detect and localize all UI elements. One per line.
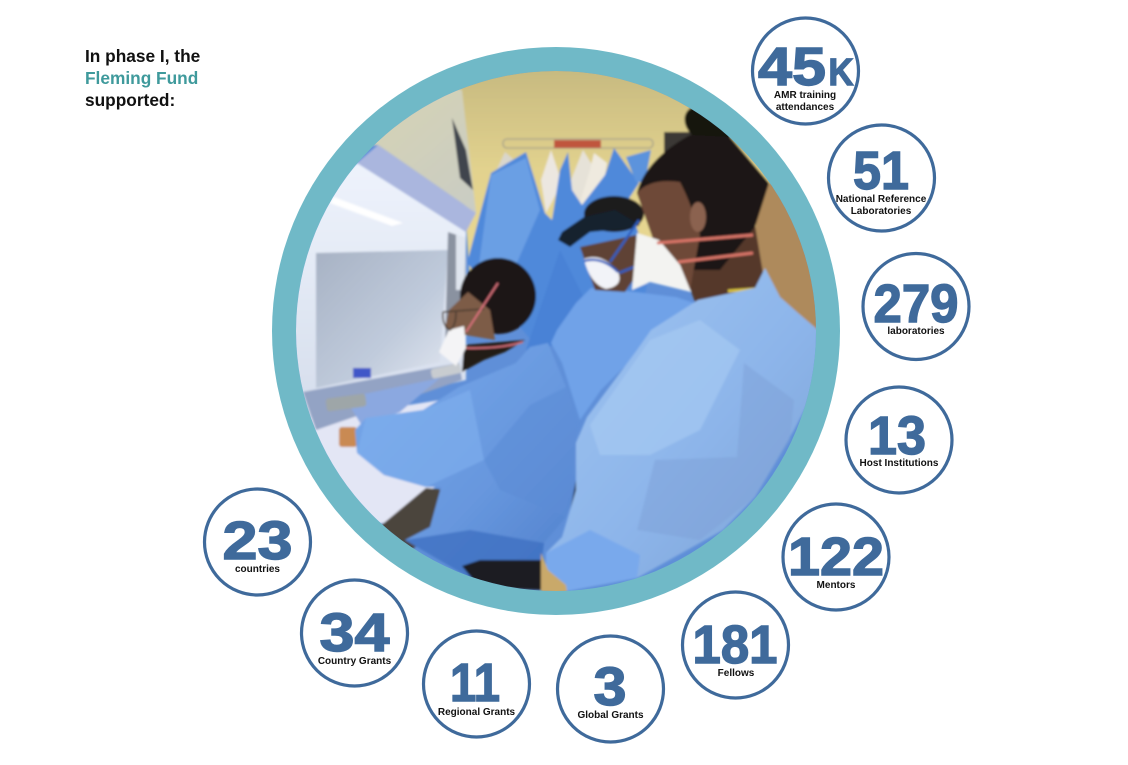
face [580,235,640,292]
heading: In phase I, the Fleming Fund supported: Fleming Fund [85,68,198,88]
stat: 45K AMR training attendances: K [828,52,854,94]
cuff [546,530,640,592]
cap [558,210,640,247]
wall notice and device [452,118,473,190]
stat: 279 laboratories: laboratories [887,326,945,337]
stat: 279 laboratories: 279 [874,274,958,334]
gown [551,288,700,420]
arm highlight [357,390,484,487]
stat: 13 Host Institutions: 13 [868,406,926,466]
stat: 11 Regional Grants: Regional Grants [438,707,516,718]
peg rail with red tag [503,139,653,148]
glasses [443,309,484,330]
stat: 45K AMR training attendances: 45 [758,37,826,97]
face [637,181,700,290]
hair bun [677,97,739,153]
black waist gap [570,482,578,506]
stat: 181 Fellows: Fellows [718,668,755,679]
stat: 23 countries [204,489,310,595]
left side wall [372,89,477,213]
glove [541,553,568,597]
blue gown folds behind workers [526,339,552,349]
mask straps [657,235,753,262]
stat: 3 Global Grants: 3 [594,657,626,717]
hood light strip [330,197,403,226]
hood window [316,250,448,388]
stat: 45K AMR training attendances: AMR training [774,90,836,101]
neck [689,226,764,302]
hair [584,196,644,232]
yellow back wall [458,71,770,272]
stat: 34 Country Grants: Country Grants [318,656,392,667]
gown [353,342,574,548]
stat: 45K AMR training attendances [752,18,858,124]
beard [462,340,525,372]
hood side post [445,232,466,350]
hair [460,258,536,334]
gown light fold [590,320,740,455]
office chair [462,560,544,590]
dark wall box [664,132,694,154]
mask straps [466,283,523,348]
stat: 11 Regional Grants: 11 [450,653,500,713]
stat: 51 National Reference Laboratories: Laboratories [851,206,912,217]
stat: 51 National Reference Laboratories [828,125,934,231]
stat: 23 countries: countries [235,564,280,575]
stat: 279 laboratories [863,254,969,360]
stat: 13 Host Institutions: Host Institutions [860,458,939,469]
stat: 3 Global Grants [558,636,664,742]
heading: In phase I, the Fleming Fund supported: In phase I, the [85,46,200,66]
fume hood glass [280,163,466,420]
gown [546,268,820,592]
small burner flame [353,368,371,378]
middle worker [551,196,700,420]
blue gowns on rail [467,148,650,345]
yellow collar trim [728,289,756,291]
stat: 11 Regional Grants [424,631,530,737]
heading: In phase I, the Fleming Fund supported: supported: [85,90,175,110]
stat: 122 Mentors: 122 [788,527,884,587]
respirator [584,257,620,289]
infographic canvas [86,16,971,744]
face [445,292,495,340]
stat: 122 Mentors: Mentors [817,580,856,591]
face mask [439,326,466,366]
seated man [355,258,578,578]
stat: 181 Fellows [682,592,788,698]
front worker [546,97,820,592]
stat: 3 Global Grants: Global Grants [577,710,644,721]
stat: 34 Country Grants [302,580,408,686]
photo: three lab workers in blue gowns at a safety cabinet [280,60,830,597]
stat: 51 National Reference Laboratories: 51 [853,141,909,201]
ear [690,202,706,232]
sleeve shading [486,400,542,462]
stat: 13 Host Institutions [846,387,952,493]
head [637,135,769,270]
hood top band [357,145,476,232]
stat: 45K AMR training attendances: attendances [776,102,835,113]
wood panelling at right [750,170,830,400]
work desk [310,399,438,525]
stat: 122 Mentors [783,504,889,610]
stat: 34 Country Grants: 34 [320,603,390,663]
sample dish [339,427,357,447]
white coats on rail [496,152,514,170]
white mask [632,233,691,292]
stat: 51 National Reference Laboratories: National Reference [836,194,927,205]
teal ring around the photo [272,47,840,615]
hood sash [303,363,462,430]
stat: 23 countries: 23 [222,511,292,571]
stat: 181 Fellows: 181 [692,615,778,675]
gown shadow fold [637,363,794,540]
